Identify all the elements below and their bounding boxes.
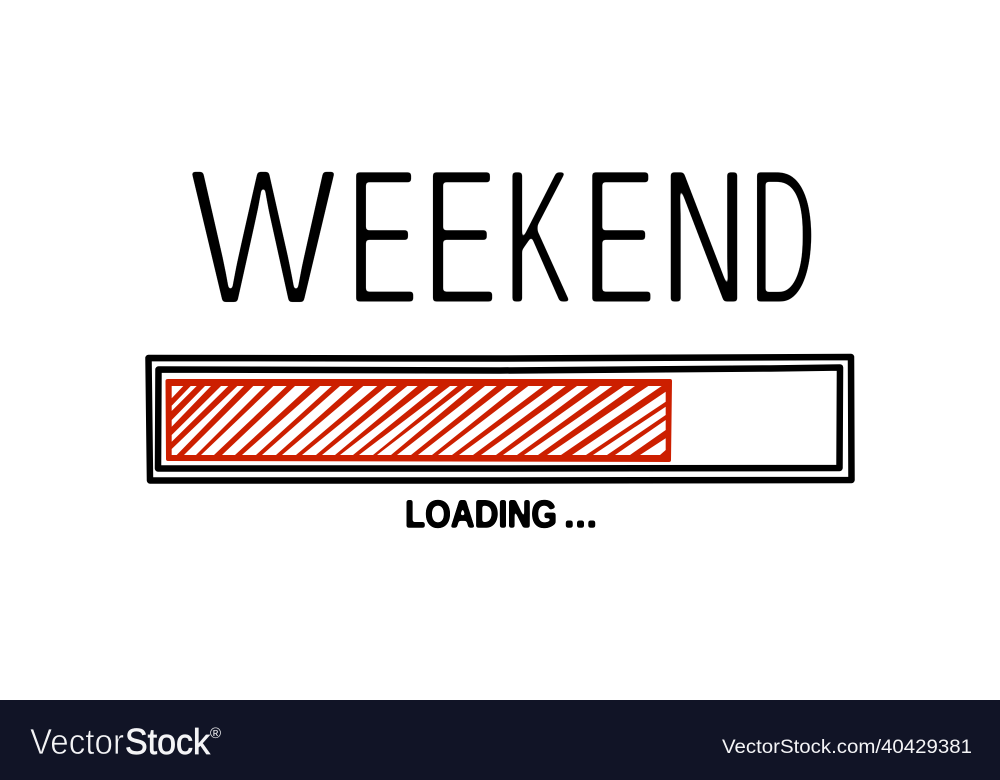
title: WEEKEND: W (188, 127, 338, 346)
title: WEEKEND: E (348, 129, 418, 346)
title: WEEKEND: E (584, 129, 655, 346)
progress bar (148, 357, 852, 480)
caption: LOADING...: LOADING (405, 494, 557, 536)
logo: VectorStock (30, 721, 211, 762)
registered mark: ® (210, 725, 221, 742)
title: WEEKEND: D (750, 129, 816, 346)
caption: LOADING...: ... (564, 494, 597, 536)
title: WEEKEND (188, 127, 816, 346)
red fill with white hatching (166, 379, 672, 462)
image id: VectorStock.com/40429381 (722, 737, 972, 758)
logo: VectorStock: Vector (30, 721, 124, 762)
logo: VectorStock: Stock (125, 721, 211, 762)
outer frame (148, 357, 852, 480)
title: WEEKEND: N (661, 129, 747, 346)
inner frame (158, 368, 840, 468)
title: WEEKEND: E (424, 129, 497, 346)
title: WEEKEND: K (504, 129, 573, 346)
footer bar (0, 700, 1000, 780)
